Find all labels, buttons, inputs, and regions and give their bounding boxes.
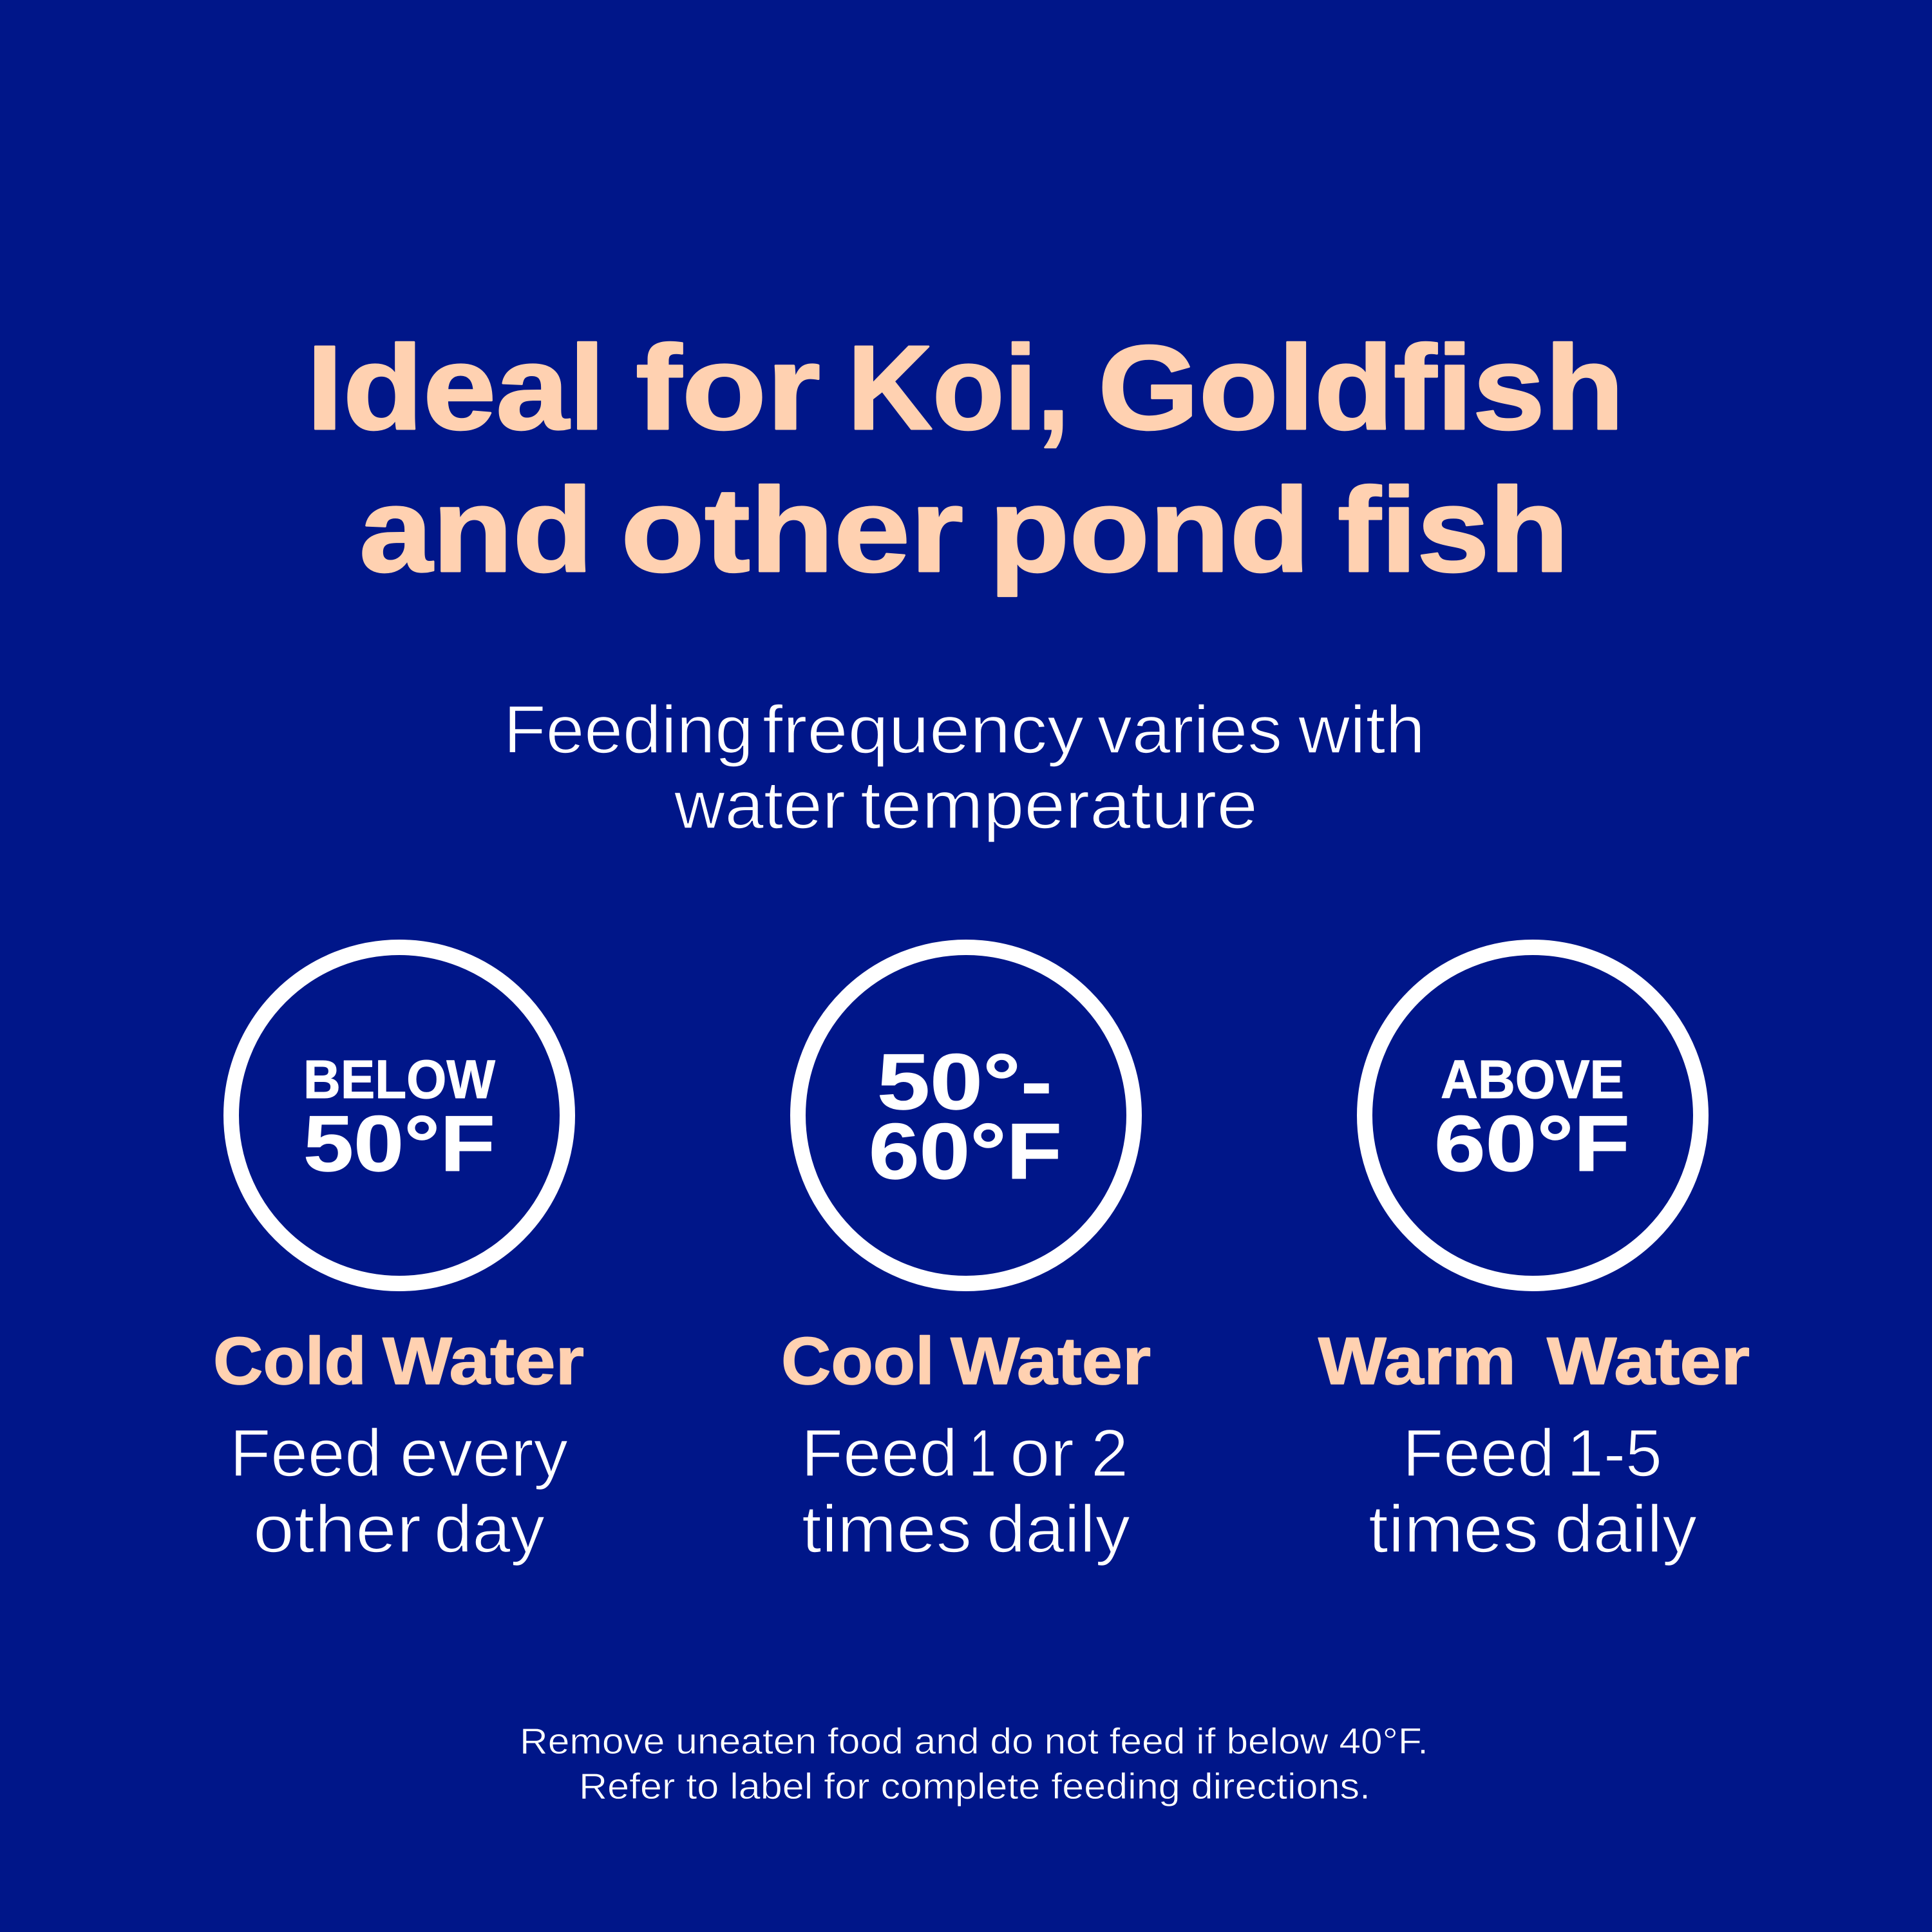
temperature label: above 60F: ABOVE [1441, 1049, 1624, 1110]
title: fish [1338, 464, 1569, 597]
feeding text: warm water: 1-5 [1567, 1416, 1662, 1491]
title: for [636, 321, 820, 455]
subtitle: temperature [860, 768, 1258, 843]
feeding text: cold water: day [434, 1492, 545, 1567]
temperature label: above 60F [1434, 1049, 1630, 1188]
feeding text: cool water [801, 1416, 1130, 1567]
feeding text: warm water: Feed [1403, 1416, 1555, 1491]
title: other [621, 464, 963, 597]
feeding text: cold water: other [253, 1492, 421, 1567]
feeding text: warm water [1368, 1416, 1697, 1567]
heading: cold water [213, 1324, 584, 1399]
footnote: Remove uneaten food and do not feed if below 40°F. [520, 1721, 1428, 1762]
feeding text: cool water: 1 [969, 1416, 996, 1491]
feeding text: cold water: every [400, 1416, 568, 1491]
temperature label: below 50F [303, 1049, 496, 1188]
icon: temperature ring above 60F [1365, 947, 1701, 1283]
footnote [520, 1721, 1428, 1807]
temperature label: 50-60F [869, 1038, 1062, 1196]
panel: warm water [1318, 947, 1750, 1567]
temperature label: 50-60F: 60°F [869, 1108, 1062, 1196]
icon: temperature ring 50-60F [798, 947, 1134, 1283]
temperature label: below 50F: BELOW [303, 1049, 496, 1110]
subtitle: Feeding [504, 692, 753, 768]
title [307, 321, 1624, 597]
subtitle: water [674, 768, 846, 843]
panel: cold water [213, 947, 584, 1567]
subtitle: with [1298, 692, 1425, 768]
heading: cold water: Cold [213, 1324, 366, 1399]
feeding text: cool water: 2 [1091, 1416, 1128, 1491]
heading: warm water: Warm [1318, 1324, 1516, 1399]
feeding text: warm water: times [1368, 1492, 1539, 1567]
feeding text: cool water: or [1010, 1416, 1074, 1491]
subtitle: varies [1097, 692, 1282, 768]
feeding text: cold water [230, 1416, 568, 1567]
heading: warm water [1318, 1324, 1750, 1399]
temperature label: below 50F: 50°F [303, 1100, 495, 1188]
subtitle: frequency [762, 692, 1084, 768]
heading: cool water: Water [951, 1324, 1151, 1399]
feeding text: cool water: Feed [801, 1416, 958, 1491]
feeding text: cool water: daily [987, 1492, 1130, 1567]
temperature label: above 60F: 60°F [1434, 1100, 1630, 1188]
title: Koi, [848, 321, 1070, 455]
title: Ideal [307, 321, 605, 455]
temperature label: 50-60F: 50°- [877, 1038, 1052, 1126]
icon: temperature ring below 50F [231, 947, 567, 1283]
feeding text: cool water: times [802, 1492, 972, 1567]
feeding text: warm water: daily [1555, 1492, 1697, 1567]
panel: cool water [781, 947, 1151, 1567]
heading: cool water: Cool [781, 1324, 934, 1399]
title: pond [989, 464, 1310, 597]
heading: cold water: Water [383, 1324, 584, 1399]
title: Goldfish [1098, 321, 1624, 455]
heading: cool water [781, 1324, 1151, 1399]
title: and [359, 464, 593, 597]
subtitle [504, 692, 1425, 843]
feeding text: cold water: Feed [230, 1416, 382, 1491]
heading: warm water: Water [1547, 1324, 1750, 1399]
footnote: Refer to label for complete feeding directions. [579, 1766, 1370, 1807]
